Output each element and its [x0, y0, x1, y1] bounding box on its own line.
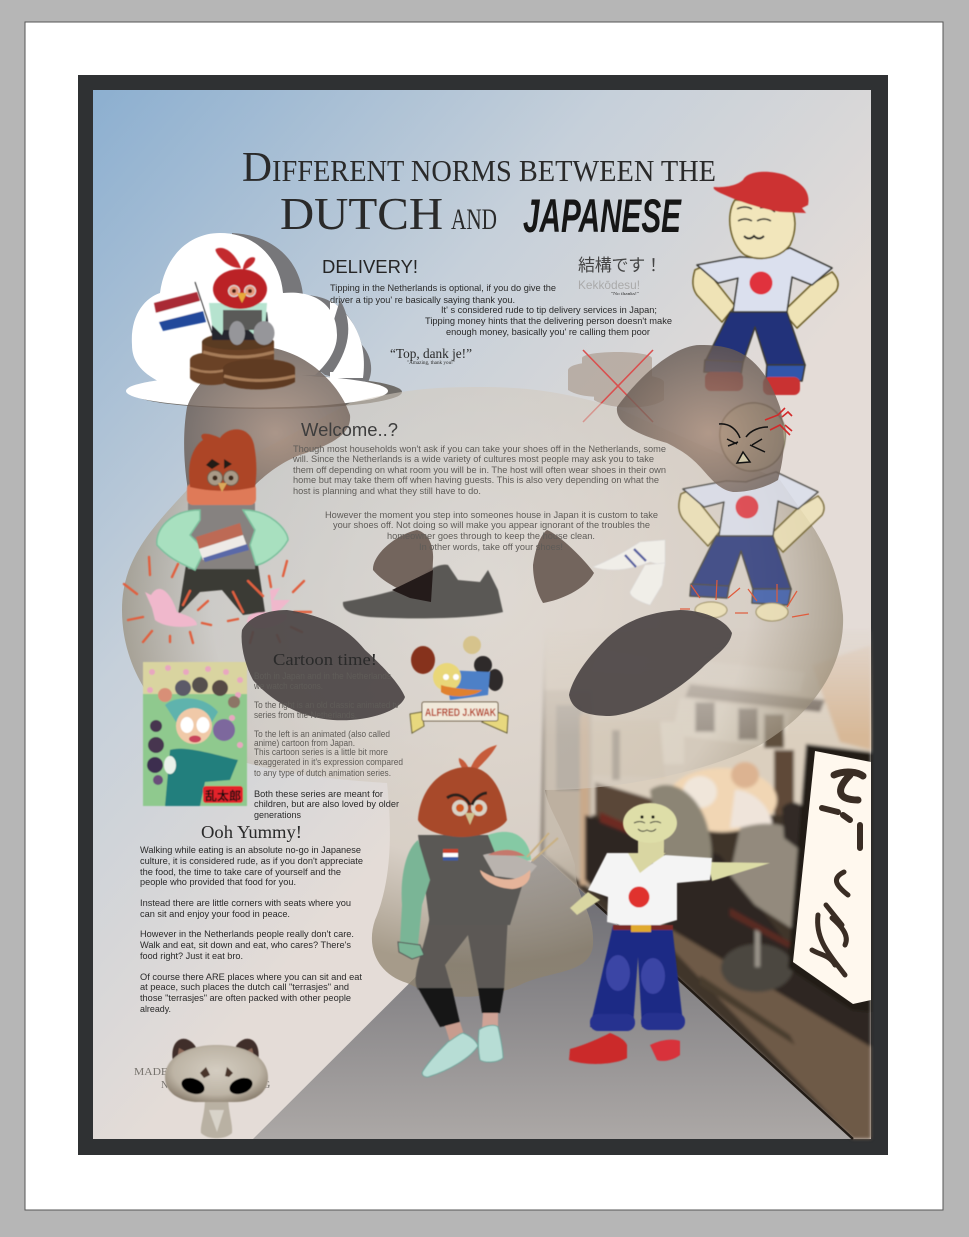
lower legs	[418, 988, 504, 1027]
cartoon text block: Both these series are meant for	[254, 789, 383, 799]
ankles	[445, 1022, 464, 1042]
stem	[201, 1098, 232, 1138]
welcome text block: host is planning and what they still have to do.	[293, 486, 481, 496]
dark poster frame	[78, 75, 888, 1155]
angry japanese man	[679, 403, 824, 621]
logo lettering: ALFRED J.KWAK	[425, 707, 496, 719]
welcome text block: your shoes off. Not doing so will make you appear ignorant of the troubles the	[333, 520, 650, 530]
cartoon text block: To the left is an animated (also called	[254, 729, 390, 739]
cuffs	[590, 1014, 635, 1031]
delivery text block: It' s considered rude to tip delivery services in Japan;	[441, 305, 657, 315]
bowl	[483, 853, 537, 880]
cartoon text block: we watch cartoons.	[253, 681, 323, 691]
chest flag	[443, 849, 458, 860]
japanese quote	[578, 256, 662, 296]
cartoon text block: to any type of dutch animation series.	[254, 768, 391, 778]
credit text: G	[263, 1080, 270, 1091]
body	[188, 503, 255, 569]
title: IFFERENT NORMS BETWEEN THE	[272, 153, 716, 188]
cartoon text block: This cartoon series is a little bit more	[254, 747, 388, 757]
poster red logo: 乱太郎	[205, 788, 241, 803]
red impact lines	[124, 557, 311, 643]
held flag	[196, 523, 249, 562]
title: DUTCH	[280, 188, 443, 239]
hand	[480, 870, 530, 889]
rising sun	[628, 886, 650, 908]
japanese quote: "No thanks!"	[611, 291, 639, 296]
cartoon text block: children, but are also loved by older	[254, 799, 399, 809]
bird on coins with flag	[154, 248, 295, 390]
blossom specks	[147, 665, 243, 748]
food text block: people who provided that food for you.	[140, 877, 296, 887]
right eye	[569, 610, 732, 716]
food text block: at peace, such places the dutch call "terrasjes" and	[140, 982, 349, 992]
pink rabbit slippers	[145, 588, 290, 628]
owl eyes	[452, 800, 468, 816]
cartoon text block	[253, 671, 403, 820]
face	[634, 815, 661, 831]
food text block: the food, the time to take care of yourself and the	[140, 867, 341, 877]
food text block: culture, it is considered rude, as if you don't appreciate	[140, 856, 363, 866]
welcome text block: In other words, take off your shoes!	[419, 542, 563, 552]
food text block: However in the Netherlands people really don't care.	[140, 929, 354, 939]
shoes	[569, 1033, 627, 1064]
grumpy owl with slippers	[124, 429, 311, 643]
head	[730, 200, 795, 258]
cartoon logo	[410, 636, 508, 733]
arms	[157, 510, 205, 570]
dutch quote: “Top, dank je!”	[390, 347, 472, 362]
feather	[459, 745, 497, 775]
welcome heading: Welcome..?	[301, 420, 398, 440]
ears	[172, 1039, 197, 1062]
street floor	[253, 853, 853, 1139]
delivery text block	[330, 283, 672, 337]
eyes and nose	[179, 1075, 207, 1097]
welcome text block	[292, 444, 666, 552]
head	[189, 429, 256, 491]
smiling face	[737, 207, 775, 238]
faded coins crossed out	[568, 350, 664, 422]
belt	[613, 925, 673, 930]
sneakers	[422, 1033, 478, 1077]
shirt	[588, 853, 712, 925]
anger mark	[765, 408, 792, 435]
title: D	[242, 145, 272, 191]
food text block: those "terrasjes" are often packed with other people	[140, 993, 351, 1003]
walking owl holding a food bowl	[398, 745, 558, 1077]
neck	[638, 838, 664, 863]
right nose	[533, 530, 594, 603]
mushroom eyes and nose	[242, 530, 732, 720]
mushroom left ear	[184, 348, 350, 490]
delivery heading: DELIVERY!	[322, 256, 418, 277]
delivery text block: driver a tip you' re basically saying thank you.	[330, 295, 515, 305]
pants	[590, 925, 683, 1027]
main ninja character	[164, 698, 238, 806]
japanese quote: 結構です！	[578, 256, 662, 275]
street photo	[540, 630, 871, 1139]
eyes	[208, 470, 222, 486]
cartoon text block: generations	[254, 810, 301, 820]
left nose	[373, 530, 433, 601]
credit text: MADE	[134, 1067, 168, 1078]
arms	[570, 892, 600, 915]
food text block: Of course there ARE places where you can sit and eat	[140, 972, 362, 982]
red cap	[714, 172, 808, 213]
cartoon text block: To the right is an old classic animated tv	[254, 700, 399, 710]
small mushroom mascot	[165, 1039, 268, 1138]
food heading: Ooh Yummy!	[201, 822, 302, 842]
title: JAPANESE	[523, 189, 682, 242]
food text block: Instead there are little corners with seats where you	[140, 898, 351, 908]
giant translucent mushroom cap and stem	[122, 387, 843, 997]
food text block: already.	[140, 1004, 171, 1014]
green arms	[400, 840, 430, 945]
head	[418, 767, 507, 837]
food text block: Walking while eating is an absolute no-go in Japanese	[140, 845, 361, 855]
flag of the Netherlands	[154, 282, 212, 333]
chopsticks	[527, 833, 558, 861]
title: AND	[451, 203, 497, 236]
dark and white sneakers	[343, 540, 665, 618]
top japanese man with cap	[693, 172, 838, 395]
welcome text block: Though most households won't ask if you can take your shoes off in the Netherlands, some	[293, 444, 666, 454]
red stomp lines	[680, 580, 809, 617]
food text block: food right? Just it eat bro.	[140, 951, 243, 961]
welcome text block: However the moment you step into someones house in Japan it is custom to take	[325, 510, 658, 520]
welcome text block: them off depending on what room you will be in. The host will often wear shoes in their own	[293, 465, 666, 475]
cloud with shadow	[126, 233, 402, 409]
coin stacks	[190, 333, 295, 390]
bird	[209, 248, 274, 345]
japanese quote: Kekkōdesu!	[578, 278, 640, 292]
angry man face	[680, 408, 809, 617]
scarf	[187, 483, 256, 505]
cartoon text block: exaggerated in it's expression compared	[254, 757, 403, 767]
delivery text block: Tipping in the Netherlands is optional, if you do give the	[330, 283, 556, 293]
hoodie body	[418, 835, 527, 925]
upper legs	[416, 915, 508, 990]
red shoes	[705, 372, 743, 391]
title	[242, 145, 716, 242]
delivery text block: enough money, basically you' re calling them poor	[446, 327, 650, 337]
legs	[178, 565, 265, 615]
anime dvd poster	[143, 662, 247, 806]
left eye	[242, 610, 405, 720]
food text block: can sit and enjoy your food in peace.	[140, 909, 290, 919]
head	[623, 803, 677, 843]
japanese boy pointing	[569, 803, 770, 1064]
crowd of characters	[147, 677, 240, 785]
head	[720, 403, 785, 471]
credit text: N	[161, 1080, 168, 1091]
feet	[695, 602, 727, 618]
cap	[165, 1045, 268, 1102]
welcome text block: home but may take them off when having guests. This is also very depending on what the	[293, 475, 659, 485]
cartoon text block: Both in Japan and in the Netherlands	[254, 671, 391, 681]
poster gradient background	[93, 90, 871, 1139]
dutch quote: "Amazing, thank you!"	[407, 361, 455, 366]
cartoon text block: series from the Netherlands.	[254, 710, 357, 720]
welcome text block: homeowner goes through to keep the house clean.	[387, 531, 595, 541]
food text block: Walk and eat, sit down and eat, who cares? There's	[140, 940, 351, 950]
wooden kerb edge	[590, 898, 853, 1139]
welcome text block: will. Since the Netherlands is a wide variety of cultures most people may ask you to take	[292, 454, 654, 464]
cartoon heading: Cartoon time!	[273, 650, 377, 669]
cartoon text block: anime) cartoon from Japan.	[254, 738, 355, 748]
food text block	[140, 845, 363, 1014]
credit text	[134, 1067, 270, 1091]
delivery text block: Tipping money hints that the delivering person doesn't make	[425, 316, 672, 326]
mushroom right ear	[617, 345, 784, 492]
sneaker laces through the nose	[392, 570, 433, 602]
